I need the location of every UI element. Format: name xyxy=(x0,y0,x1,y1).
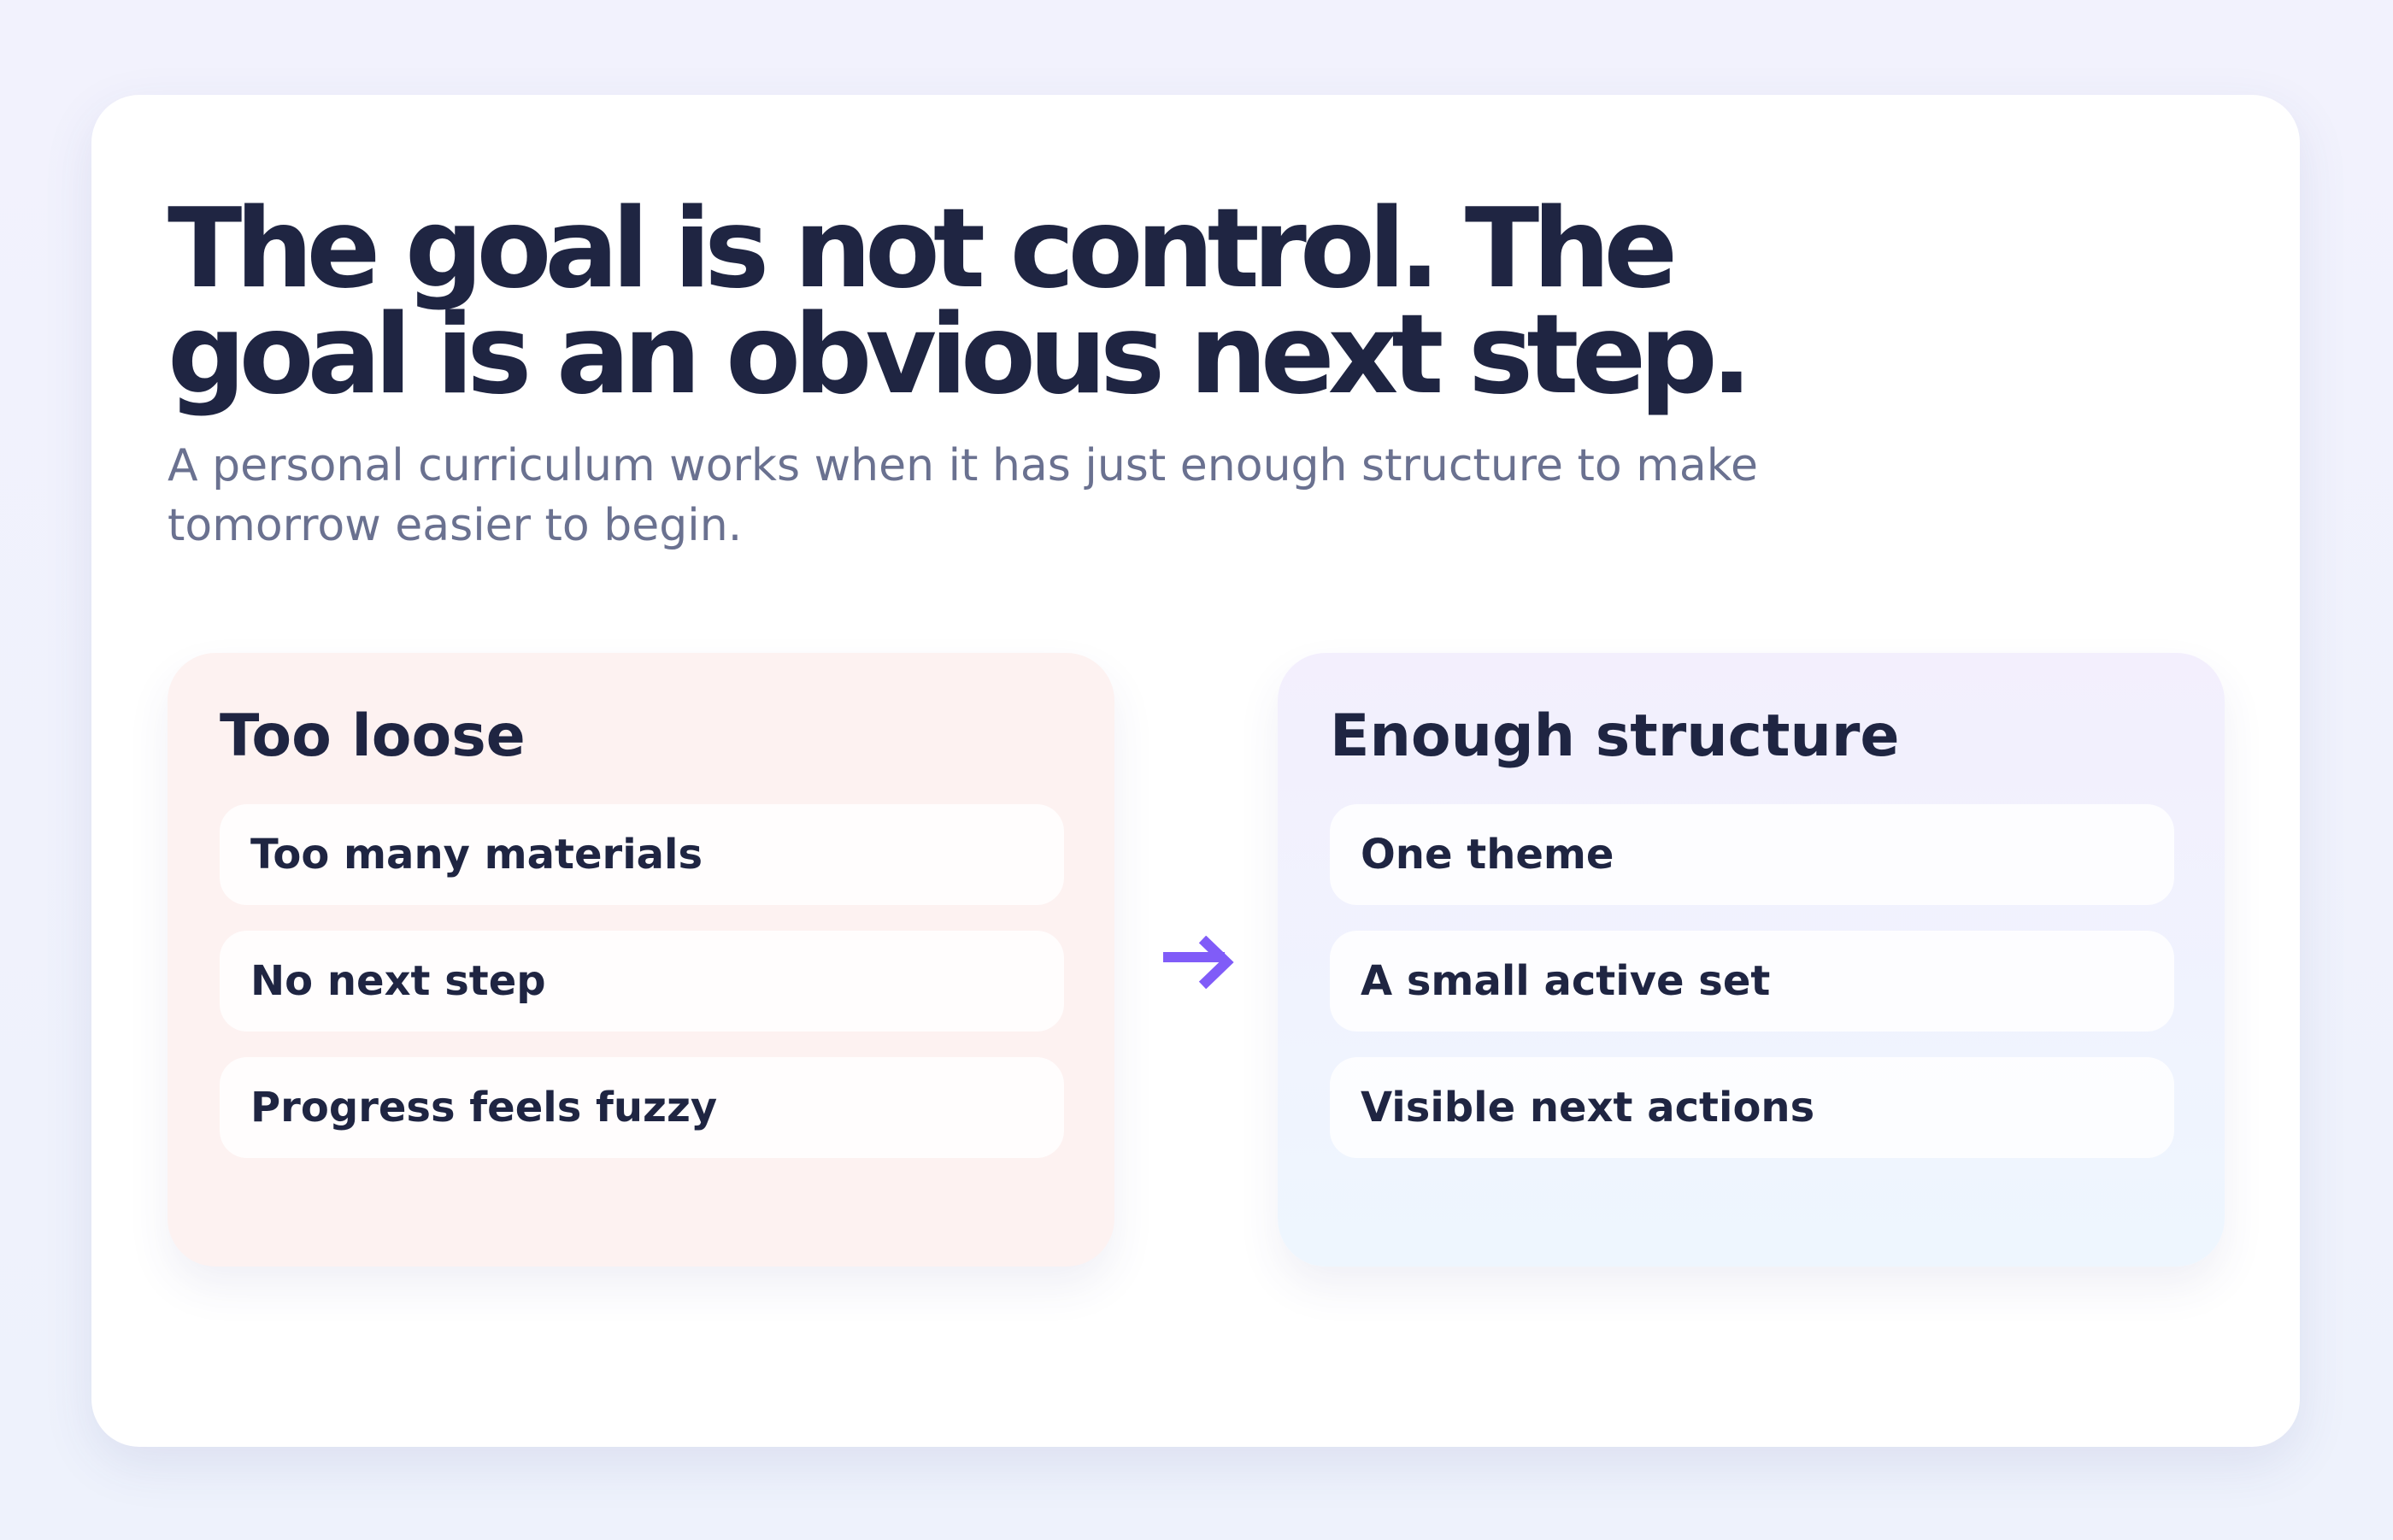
item: visible next actions xyxy=(1330,1057,2174,1158)
item: one theme: One theme xyxy=(1361,831,1614,879)
panel: enough structure xyxy=(1278,653,2225,1267)
item: too many materials: Too many materials xyxy=(250,831,703,879)
arrow xyxy=(1163,936,1234,989)
item: one theme xyxy=(1330,804,2174,905)
item: a small active set: A small active set xyxy=(1361,957,1770,1005)
item: no next step: No next step xyxy=(250,957,546,1005)
subtitle: A personal curriculum works when it has just enough structure to make tomorrow easier to begin. xyxy=(168,440,1758,551)
panel: too loose xyxy=(168,653,1114,1267)
heading: too loose: Too loose xyxy=(220,702,526,770)
item: progress feels fuzzy xyxy=(220,1057,1064,1158)
item: visible next actions: Visible next actions xyxy=(1361,1084,1814,1131)
item: a small active set xyxy=(1330,931,2174,1032)
title: The goal is not control. The xyxy=(168,185,1671,313)
item: no next step xyxy=(220,931,1064,1032)
title: goal is an obvious next step. xyxy=(168,291,1745,419)
heading: enough structure: Enough structure xyxy=(1330,702,1900,770)
item: progress feels fuzzy: Progress feels fuzzy xyxy=(250,1084,717,1131)
item: too many materials xyxy=(220,804,1064,905)
title xyxy=(168,185,1745,419)
